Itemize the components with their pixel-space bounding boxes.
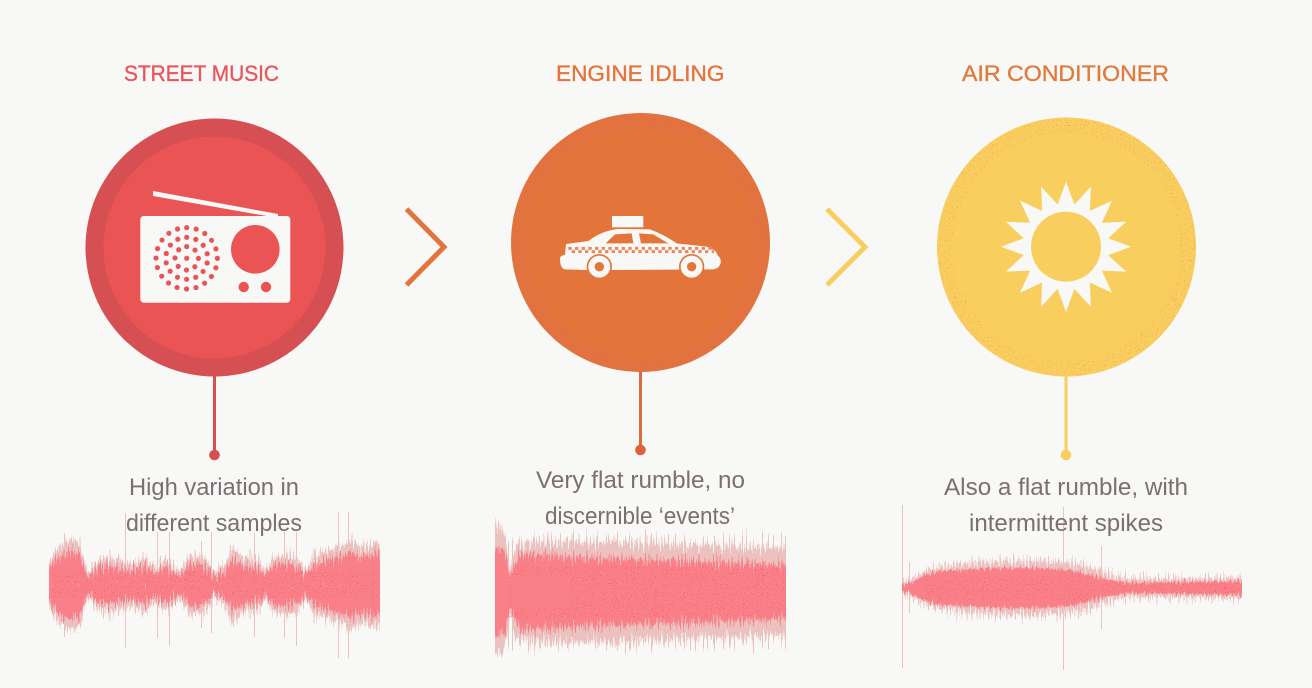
description xyxy=(944,474,1188,537)
panel: street music xyxy=(49,61,380,658)
circle badge xyxy=(511,113,770,372)
arrow: second chevron xyxy=(827,209,865,285)
panel: air conditioner xyxy=(902,61,1242,670)
icon: taxi xyxy=(560,216,721,279)
icon: radio xyxy=(140,191,290,303)
arrow: first chevron xyxy=(406,209,444,285)
heading: engine idling: ENGINE IDLING xyxy=(556,61,724,86)
description: Very flat rumble, no xyxy=(536,467,745,494)
heading: air conditioner: AIR CONDITIONER xyxy=(962,61,1169,86)
connector line with dot xyxy=(209,374,220,460)
icon: sun xyxy=(1001,182,1131,312)
description: different samples xyxy=(126,510,302,537)
description: High variation in xyxy=(129,474,299,501)
waveform: engine idling xyxy=(495,524,786,656)
waveform: air conditioner xyxy=(902,505,1242,670)
heading: street music: STREET MUSIC xyxy=(124,61,279,86)
description: Also a flat rumble, with xyxy=(944,474,1188,501)
description xyxy=(126,474,302,537)
circle badge xyxy=(86,118,344,376)
connector line with dot xyxy=(1061,374,1071,460)
waveform: street music xyxy=(49,512,380,658)
circle badge xyxy=(937,118,1196,376)
description xyxy=(536,467,745,530)
description: intermittent spikes xyxy=(969,510,1163,537)
description: discernible ‘events’ xyxy=(545,503,735,530)
connector line with dot xyxy=(635,370,646,455)
panel: engine idling xyxy=(495,61,786,656)
